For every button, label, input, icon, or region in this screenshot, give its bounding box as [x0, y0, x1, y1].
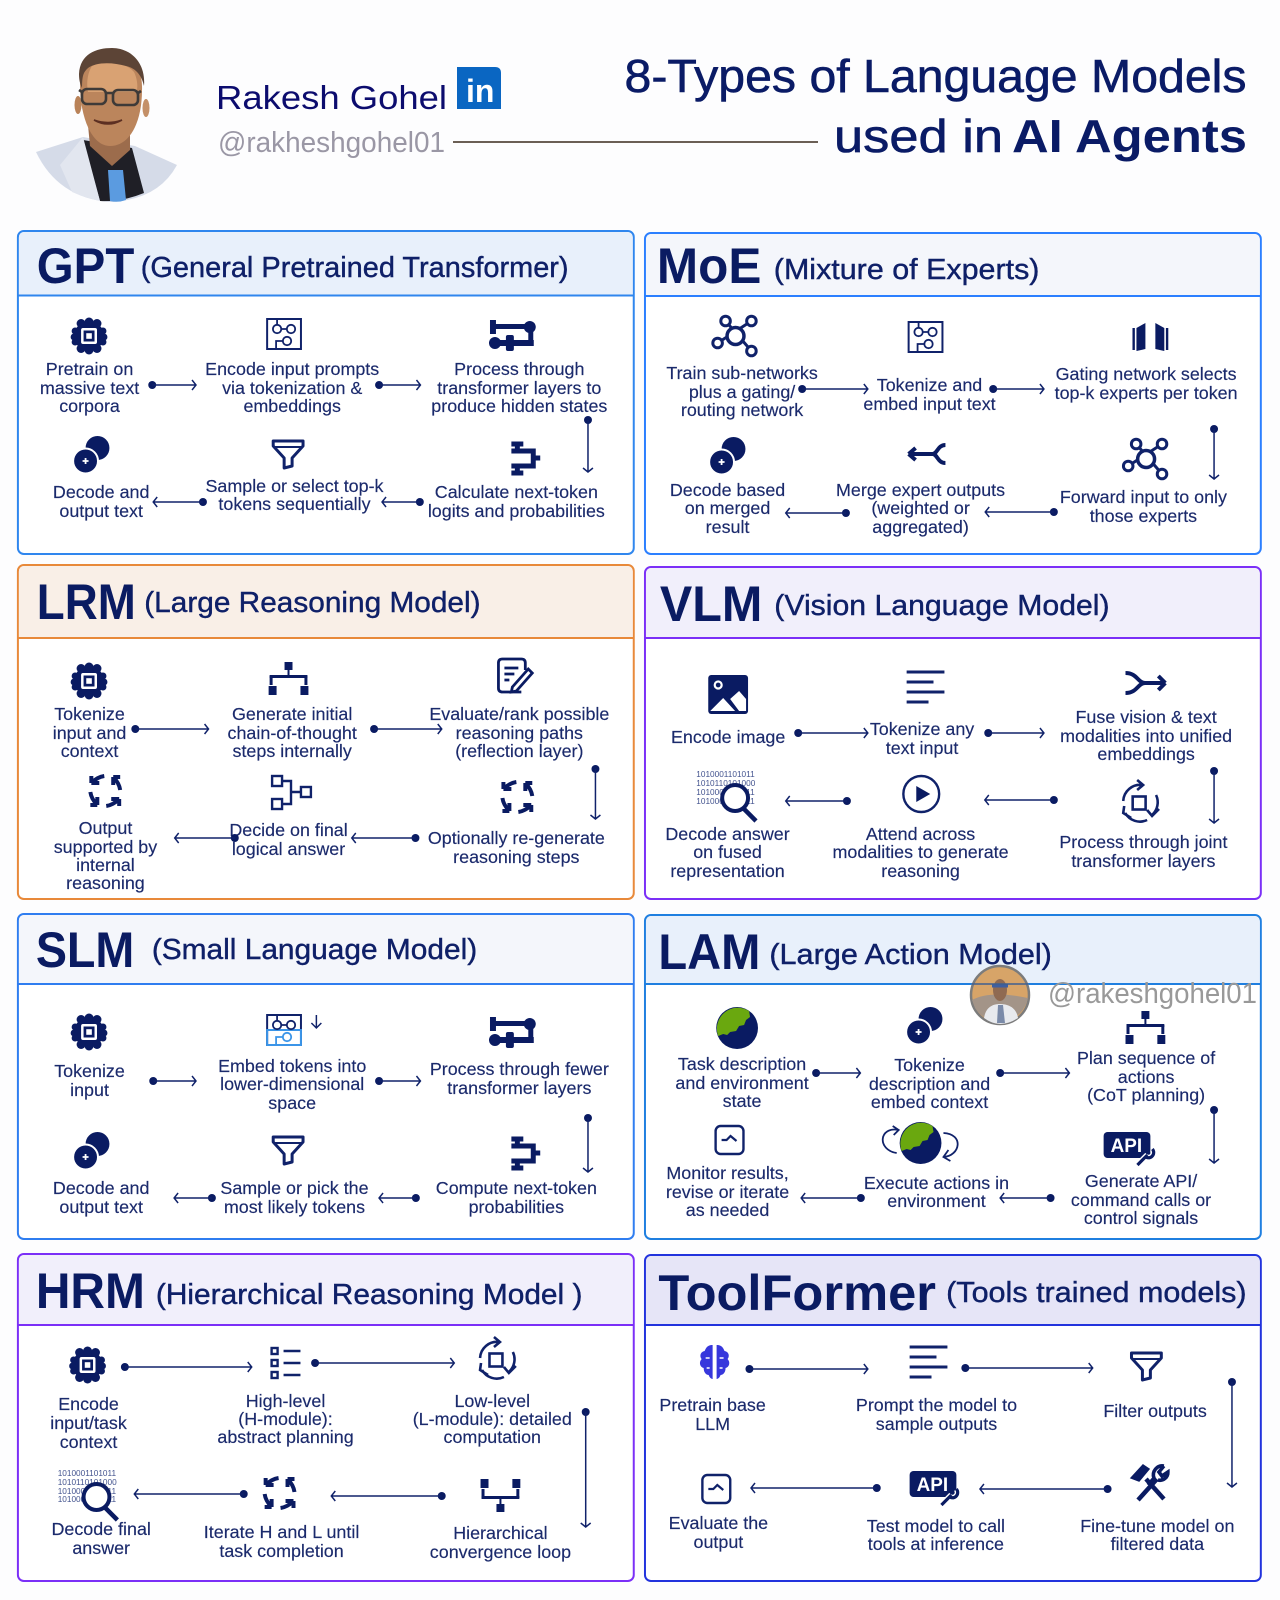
step text: pretrain: corpora: [59, 396, 120, 416]
arrow: [751, 1483, 881, 1493]
arrow: [153, 497, 207, 507]
step text: generate: steps internally: [233, 741, 352, 761]
step text: optionally: Optionally re-generate: [428, 828, 605, 848]
step text: low-level: computation: [444, 1427, 541, 1447]
heading: LAM: (Large Action Model): [769, 939, 1052, 971]
step text: pretrain: LLM: [695, 1414, 730, 1434]
step text: task: state: [723, 1091, 761, 1111]
step text: decode: Decode based: [670, 480, 785, 500]
heading: LRM: (Large Reasoning Model): [144, 587, 481, 619]
step text: gating: top-k experts per token: [1055, 383, 1238, 403]
step text: merge: Merge expert outputs: [836, 480, 1005, 500]
step text: process: Process through fewer: [430, 1059, 609, 1079]
step text: sample: Sample or select top-k: [205, 476, 384, 496]
step text: output: Output: [79, 818, 132, 838]
icon: coins: [906, 1007, 942, 1044]
icon: funnel: [273, 441, 303, 468]
icon: logits: [511, 1139, 540, 1168]
heading: SLM: SLM: [36, 922, 134, 978]
arrow: [331, 1491, 446, 1501]
arrow: [801, 1193, 865, 1203]
panel: HRM: [18, 1254, 634, 1581]
step text: fuse: Fuse vision & text: [1075, 707, 1217, 727]
step text: process: Process through joint: [1059, 832, 1227, 852]
icon: brain: [700, 1345, 729, 1379]
arrow: [985, 507, 1058, 517]
step text: process: transformer layers: [447, 1078, 591, 1098]
step text: prompt: sample outputs: [876, 1414, 997, 1434]
step text: tokenize: Tokenize: [54, 1061, 125, 1081]
step text: generate: Generate API/: [1085, 1171, 1197, 1191]
heading: ToolFormer: (Tools trained models): [946, 1277, 1247, 1309]
icon: linkedin badge: [457, 67, 501, 109]
step text: merge: (weighted or: [871, 498, 970, 518]
heading: MoE: (Mixture of Experts): [774, 254, 1039, 286]
step text: attend: Attend across: [866, 824, 975, 844]
step text: embed: lower-dimensional: [220, 1074, 364, 1094]
step text: output: supported by: [54, 837, 157, 857]
title: 8-Types of Language Models: [624, 50, 1246, 102]
step text: execute: Execute actions in: [864, 1173, 1009, 1193]
arrow: [583, 416, 593, 472]
icon: binary magnifier: 1010001101011: [696, 788, 755, 797]
step text: fuse: embeddings: [1097, 744, 1195, 764]
arrow: small down: [311, 1015, 321, 1028]
step text: test: tools at inference: [868, 1534, 1004, 1554]
step text: process: produce hidden states: [431, 396, 607, 416]
step text: high-level: High-level: [246, 1391, 325, 1411]
arrow: [375, 1076, 420, 1086]
arrow: [786, 796, 851, 806]
arrow: [985, 795, 1058, 805]
step text: tokenize: input and: [53, 723, 126, 743]
arrow: [1209, 425, 1219, 479]
icon: linkedin badge: in: [466, 73, 494, 109]
arrow: [121, 1362, 252, 1372]
arrow: [786, 508, 850, 518]
icon: logits: [511, 444, 540, 473]
step text: decode final: Decode final: [51, 1519, 151, 1539]
arrow: [379, 1193, 420, 1203]
heading: LAM: [658, 924, 1052, 980]
icon: chip: [71, 662, 107, 700]
step text: high-level: (H-module):: [238, 1409, 333, 1429]
step text: gating: Gating network selects: [1056, 364, 1237, 384]
icon: globe: [716, 1007, 758, 1049]
icon: cycle: [90, 776, 120, 806]
icon: API: API: [1111, 1136, 1142, 1157]
step text: output: internal: [76, 855, 135, 875]
arrow: [375, 380, 420, 390]
arrow: [1209, 1106, 1219, 1163]
step text: output: reasoning: [66, 873, 145, 893]
step text: task: Task description: [678, 1054, 806, 1074]
step text: pretrain: Pretrain base: [659, 1395, 766, 1415]
step text: encode: context: [60, 1432, 117, 1452]
step text: train: plus a gating/: [689, 382, 795, 402]
arrow: [352, 833, 419, 843]
icon: image: [708, 675, 748, 714]
icon: hierarchy: [269, 662, 308, 695]
step text: tokenize: input: [70, 1080, 109, 1100]
arrow: [148, 380, 196, 390]
heading: VLM: [660, 576, 1110, 632]
step text: high-level: abstract planning: [217, 1427, 354, 1447]
icon: binary magnifier: 1010001101011: [696, 770, 755, 779]
step text: evaluate: Evaluate/rank possible: [429, 704, 609, 724]
step text: train: routing network: [681, 400, 803, 420]
step text: low-level: (L-module): detailed: [413, 1409, 572, 1429]
heading: HRM: HRM: [36, 1263, 145, 1319]
step text: decode: on fused: [693, 842, 762, 862]
heading: ToolFormer: [658, 1265, 1247, 1321]
icon: binary magnifier: 1010001101011: [58, 1487, 116, 1496]
step text: decode: result: [706, 517, 749, 537]
arrow: [961, 1363, 1093, 1373]
icon: coins: [73, 436, 109, 474]
arrow: [984, 728, 1044, 738]
step text: merge: aggregated): [872, 517, 969, 537]
step text: decide: logical answer: [232, 839, 345, 859]
icon: monitor: [702, 1475, 730, 1503]
step text: encode: input/task: [50, 1413, 127, 1433]
step text: evaluate: (reflection layer): [455, 741, 583, 761]
icon: API: [910, 1471, 958, 1505]
step text: tokenize: embed context: [871, 1092, 988, 1112]
icon: gate doors: [1132, 323, 1168, 351]
step text: decode: representation: [670, 861, 785, 881]
arrow: [175, 833, 239, 843]
step text: decode: Decode and: [53, 482, 149, 502]
step text: pretrain: Pretrain on: [46, 359, 133, 379]
arrow: [382, 497, 424, 507]
arrow: [989, 384, 1044, 394]
heading: MoE: MoE: [657, 238, 761, 294]
step text: decode final: answer: [72, 1538, 130, 1558]
step text: optionally: reasoning steps: [453, 847, 580, 867]
step text: generate: control signals: [1084, 1208, 1198, 1228]
step text: process: Process through: [454, 359, 584, 379]
icon: binary magnifier: 1010001101011: [58, 1495, 116, 1504]
heading: LRM: [37, 574, 481, 630]
icon: flow: [489, 320, 536, 351]
step text: evaluate: output: [694, 1532, 743, 1552]
step text: forward: those experts: [1090, 506, 1197, 526]
icon: monitor: [716, 1126, 743, 1154]
icon: list: [272, 1348, 300, 1378]
step text: decode: Decode and: [53, 1178, 149, 1198]
arrow: [996, 1068, 1069, 1078]
step text: calculate: Calculate next-token: [435, 482, 598, 502]
step text: train: Train sub-networks: [666, 363, 818, 383]
heading: SLM: [36, 922, 477, 978]
icon: branch: [272, 776, 311, 809]
step text: compute: Compute next-token: [436, 1178, 597, 1198]
heading: VLM: VLM: [660, 576, 762, 632]
step text: sample: Sample or pick the: [220, 1178, 369, 1198]
icon: merge: [909, 445, 945, 463]
step text: process: transformer layers: [1071, 851, 1216, 871]
step text: low-level: Low-level: [454, 1391, 530, 1411]
icon: flow: [489, 1017, 536, 1048]
step text: hierarchical: convergence loop: [430, 1542, 571, 1562]
heading: LRM: LRM: [37, 574, 136, 630]
step text: encode: embeddings: [243, 396, 341, 416]
step text: encode image: Encode image: [671, 727, 785, 747]
step text: calculate: logits and probabilities: [428, 501, 605, 521]
arrow: [1227, 1378, 1237, 1487]
step text: filter: Filter outputs: [1103, 1401, 1207, 1421]
header: author avatar: [36, 48, 177, 202]
icon: edit: [498, 659, 532, 692]
step text: generate: chain-of-thought: [228, 723, 357, 743]
step text: iterate: task completion: [219, 1541, 344, 1561]
icon: circuit: [267, 1015, 301, 1045]
icon: binary magnifier: 1010001101011: [58, 1469, 116, 1478]
step text: encode: Encode: [58, 1394, 119, 1414]
step text: generate: command calls or: [1071, 1190, 1211, 1210]
heading: GPT: GPT: [37, 238, 134, 294]
icon: loop: [480, 1337, 516, 1379]
icon: API: API: [917, 1475, 948, 1496]
icon: loop: [1123, 780, 1159, 822]
step text: monitor: as needed: [686, 1200, 769, 1220]
step text: embed: Embed tokens into: [218, 1056, 366, 1076]
heading: MoE: [657, 238, 1039, 294]
arrow: [149, 1076, 196, 1086]
icon: chip: [69, 1346, 106, 1384]
arrow: [131, 724, 209, 734]
heading: GPT: (General Pretrained Transformer): [141, 252, 569, 284]
icon: text lines: [910, 1347, 947, 1377]
heading: LAM: LAM: [658, 924, 760, 980]
icon: coins: [709, 437, 745, 474]
step text: pretrain: massive text: [40, 378, 139, 398]
heading: GPT: [37, 238, 569, 294]
step text: evaluate: Evaluate the: [669, 1513, 768, 1533]
arrow: [798, 384, 868, 394]
step text: execute: environment: [887, 1191, 986, 1211]
icon: globe with loop arrows: [883, 1122, 958, 1164]
arrow: [812, 1068, 860, 1078]
arrow: [590, 765, 600, 819]
icon: chip: [71, 318, 107, 354]
panel: SLM: [18, 914, 634, 1239]
panel: LRM: [18, 565, 634, 899]
arrow: [311, 1358, 454, 1368]
icon: API: [1104, 1132, 1154, 1165]
panel: MoE: [645, 233, 1261, 554]
step text: compute: probabilities: [469, 1197, 564, 1217]
title: AI Agents: [1012, 110, 1247, 162]
icon: network: [713, 316, 756, 356]
step text: fine-tune: Fine-tune model on: [1080, 1516, 1234, 1536]
icon: circuit: [909, 322, 942, 352]
panel: LAM: [645, 915, 1261, 1239]
step text: encode: via tokenization &: [222, 378, 362, 398]
step text: monitor: Monitor results,: [666, 1163, 789, 1183]
arrow: [581, 1408, 591, 1527]
icon: cycle: [502, 782, 532, 812]
icon: binary magnifier: 1010001101011: [696, 797, 755, 806]
arrow: [174, 1193, 216, 1203]
arrow: [980, 1484, 1112, 1494]
step text: encode: Encode input prompts: [205, 359, 379, 379]
header: author name: Rakesh Gohel: [216, 79, 447, 116]
watermark: avatar and handle: [971, 966, 1257, 1024]
step text: sample: most likely tokens: [224, 1197, 365, 1217]
step text: fine-tune: filtered data: [1111, 1534, 1204, 1554]
icon: play: [903, 776, 939, 812]
icon: funnel: [273, 1137, 303, 1164]
step text: plan: Plan sequence of: [1077, 1048, 1216, 1068]
title: [624, 50, 1247, 162]
step text: tokenize: description and: [869, 1074, 990, 1094]
icon: network: [1123, 439, 1167, 479]
step text: task: and environment: [675, 1073, 809, 1093]
icon: fuse: [1126, 673, 1165, 693]
step text: tokenize: text input: [886, 738, 958, 758]
heading: HRM: [36, 1263, 582, 1319]
panel: VLM: [645, 567, 1261, 899]
step text: test: Test model to call: [867, 1516, 1005, 1536]
icon: funnel: [1131, 1353, 1161, 1380]
step text: tokenize: Tokenize any: [870, 719, 974, 739]
header: handle: @rakheshgohel01: [218, 127, 445, 159]
step text: forward: Forward input to only: [1060, 487, 1227, 507]
icon: binary magnifier: [696, 770, 756, 821]
panel: ToolFormer: [645, 1255, 1261, 1581]
icon: tools: [1131, 1465, 1168, 1500]
step text: tokenize: Tokenize: [894, 1055, 965, 1075]
step text: decode: output text: [59, 501, 143, 521]
step text: generate: Generate initial: [232, 704, 352, 724]
step text: attend: reasoning: [881, 861, 960, 881]
arrow: [1000, 1193, 1055, 1203]
step text: process: transformer layers to: [437, 378, 601, 398]
arrow: [134, 1489, 248, 1499]
step text: plan: actions: [1118, 1067, 1174, 1087]
icon: circuit: [267, 319, 301, 349]
step text: decode: output text: [59, 1197, 143, 1217]
arrow: [794, 728, 868, 738]
step text: decode: on merged: [685, 498, 770, 518]
watermark: avatar and handle: @rakeshgohel01: [1048, 978, 1257, 1010]
step text: sample: tokens sequentially: [218, 494, 371, 514]
icon: cycle: [265, 1478, 294, 1508]
step text: prompt: Prompt the model to: [856, 1395, 1017, 1415]
heading: VLM: (Vision Language Model): [774, 590, 1110, 622]
icon: binary magnifier: 1010110101000: [58, 1478, 117, 1487]
icon: convergence: [481, 1479, 520, 1512]
step text: fuse: modalities into unified: [1060, 726, 1232, 746]
step text: attend: modalities to generate: [833, 842, 1009, 862]
title: used in: [834, 110, 1003, 162]
arrow: [1209, 767, 1219, 823]
icon: chip: [71, 1014, 107, 1050]
icon: binary magnifier: [58, 1469, 117, 1520]
step text: decode: Decode answer: [665, 824, 790, 844]
step text: decide: Decide on final: [229, 820, 348, 840]
icon: binary magnifier: 1010110101000: [696, 779, 756, 788]
step text: embed: space: [268, 1093, 316, 1113]
arrow: [370, 724, 442, 734]
icon: text lines: [907, 672, 944, 702]
step text: evaluate: reasoning paths: [456, 723, 583, 743]
heading: ToolFormer: ToolFormer: [658, 1265, 936, 1321]
step text: iterate: Iterate H and L until: [204, 1522, 359, 1542]
step text: plan: (CoT planning): [1087, 1085, 1205, 1105]
step text: tokenize: Tokenize: [54, 704, 125, 724]
arrow: [583, 1114, 593, 1172]
panel: GPT: [18, 231, 634, 554]
icon: hierarchy: [1126, 1011, 1165, 1044]
step text: monitor: revise or iterate: [666, 1182, 789, 1202]
step text: hierarchical: Hierarchical: [453, 1523, 548, 1543]
step text: tokenize: Tokenize and: [877, 375, 982, 395]
arrow: [745, 1364, 868, 1374]
step text: tokenize: embed input text: [863, 394, 996, 414]
step text: tokenize: context: [61, 741, 118, 761]
heading: SLM: (Small Language Model): [152, 934, 477, 966]
heading: HRM: (Hierarchical Reasoning Model ): [156, 1279, 582, 1311]
icon: coins: [73, 1132, 109, 1170]
